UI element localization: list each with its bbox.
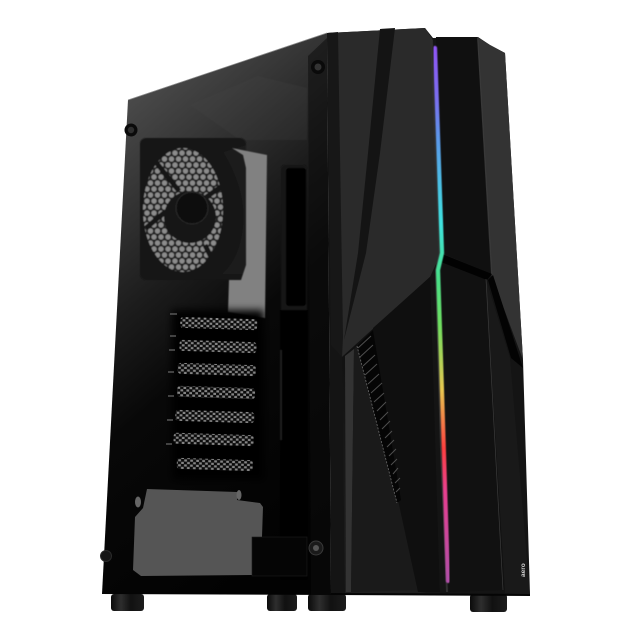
fan mesh	[143, 148, 223, 272]
lower side strip	[486, 279, 530, 595]
dark left band	[327, 32, 343, 357]
black wedge	[488, 275, 523, 368]
dark streak	[344, 28, 395, 340]
lower left fill	[351, 330, 418, 592]
centre channel	[431, 38, 447, 592]
internal drive bay	[280, 165, 308, 580]
expansion slot shield	[166, 310, 264, 480]
fan assembly	[140, 138, 246, 280]
fan struts	[146, 161, 222, 261]
right side of vent fill	[373, 277, 440, 592]
glass top edge highlight	[128, 33, 327, 100]
panel seam lines	[478, 40, 503, 590]
screws	[100, 60, 325, 562]
bottom edge	[331, 594, 530, 595]
front panel	[327, 28, 530, 595]
PSU cover block	[252, 537, 307, 576]
glass side panel	[102, 33, 331, 595]
black crease	[441, 254, 492, 280]
RGB LED strip	[435, 48, 448, 581]
fan motor disc	[164, 191, 216, 243]
upper left facet	[328, 28, 441, 357]
fan housing curve	[222, 145, 246, 274]
lower right panel	[441, 262, 505, 592]
right upper panel	[436, 37, 492, 274]
lower left panel	[342, 277, 440, 593]
slot rows	[173, 317, 257, 471]
slot tabs	[166, 314, 177, 444]
frame band	[308, 38, 331, 595]
logo: aero	[520, 563, 527, 577]
vent	[357, 330, 401, 503]
right side facet	[477, 37, 523, 360]
PSU cutout	[133, 489, 263, 576]
metal plate behind fan	[228, 148, 267, 318]
top ventilation shade	[190, 76, 307, 140]
PSU mount holes	[135, 490, 242, 508]
light strip facet	[345, 349, 354, 592]
feet	[111, 594, 507, 612]
